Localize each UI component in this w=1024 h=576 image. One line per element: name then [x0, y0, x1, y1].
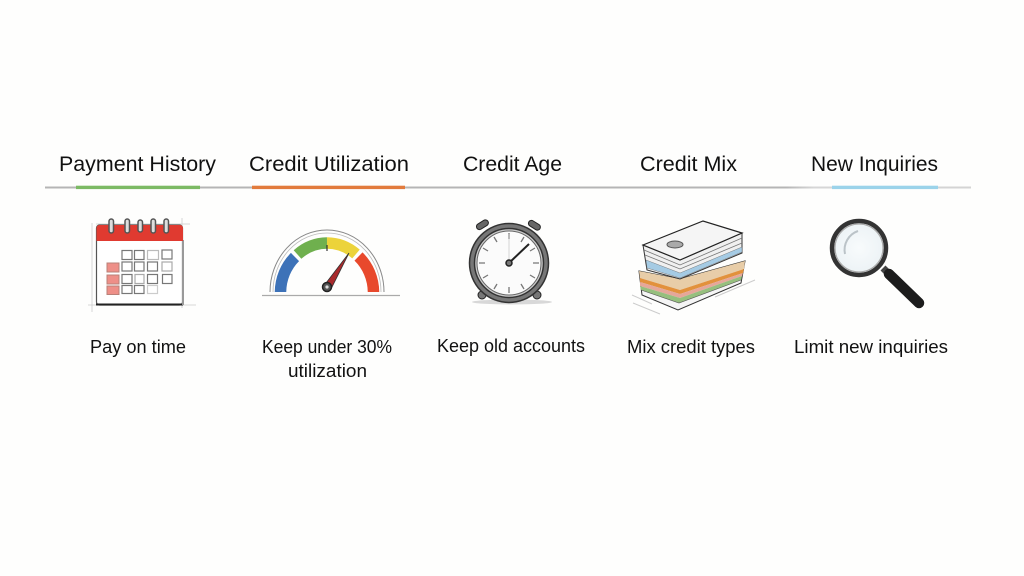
- caption: Keep old accounts: Keep old accounts: [437, 336, 585, 356]
- icon: stacked credit cards: [632, 221, 755, 314]
- icon: credit utilization gauge: [262, 230, 400, 296]
- caption: Keep under 30% utilization: utilization: [288, 361, 367, 381]
- caption: Keep under 30% utilization: [262, 337, 392, 381]
- heading: Credit Utilization: Credit Utilization: [249, 153, 409, 176]
- heading: Credit Age: Credit Age: [463, 153, 562, 176]
- timeline rule with colored segments: [45, 186, 971, 189]
- heading: New Inquiries: New Inquiries: [811, 153, 938, 176]
- heading: Credit Mix: Credit Mix: [640, 153, 738, 176]
- caption: Pay on time: Pay on time: [90, 337, 186, 357]
- icon: calendar: [88, 218, 196, 312]
- heading: Payment History: Payment History: [59, 153, 217, 176]
- caption: Mix credit types: Mix credit types: [627, 337, 755, 357]
- icon: magnifying glass: [832, 221, 919, 303]
- icon: clock: [470, 219, 552, 304]
- caption: Limit new inquiries: Limit new inquiries: [794, 337, 948, 357]
- caption: Keep under 30% utilization: Keep under 30%: [262, 337, 392, 357]
